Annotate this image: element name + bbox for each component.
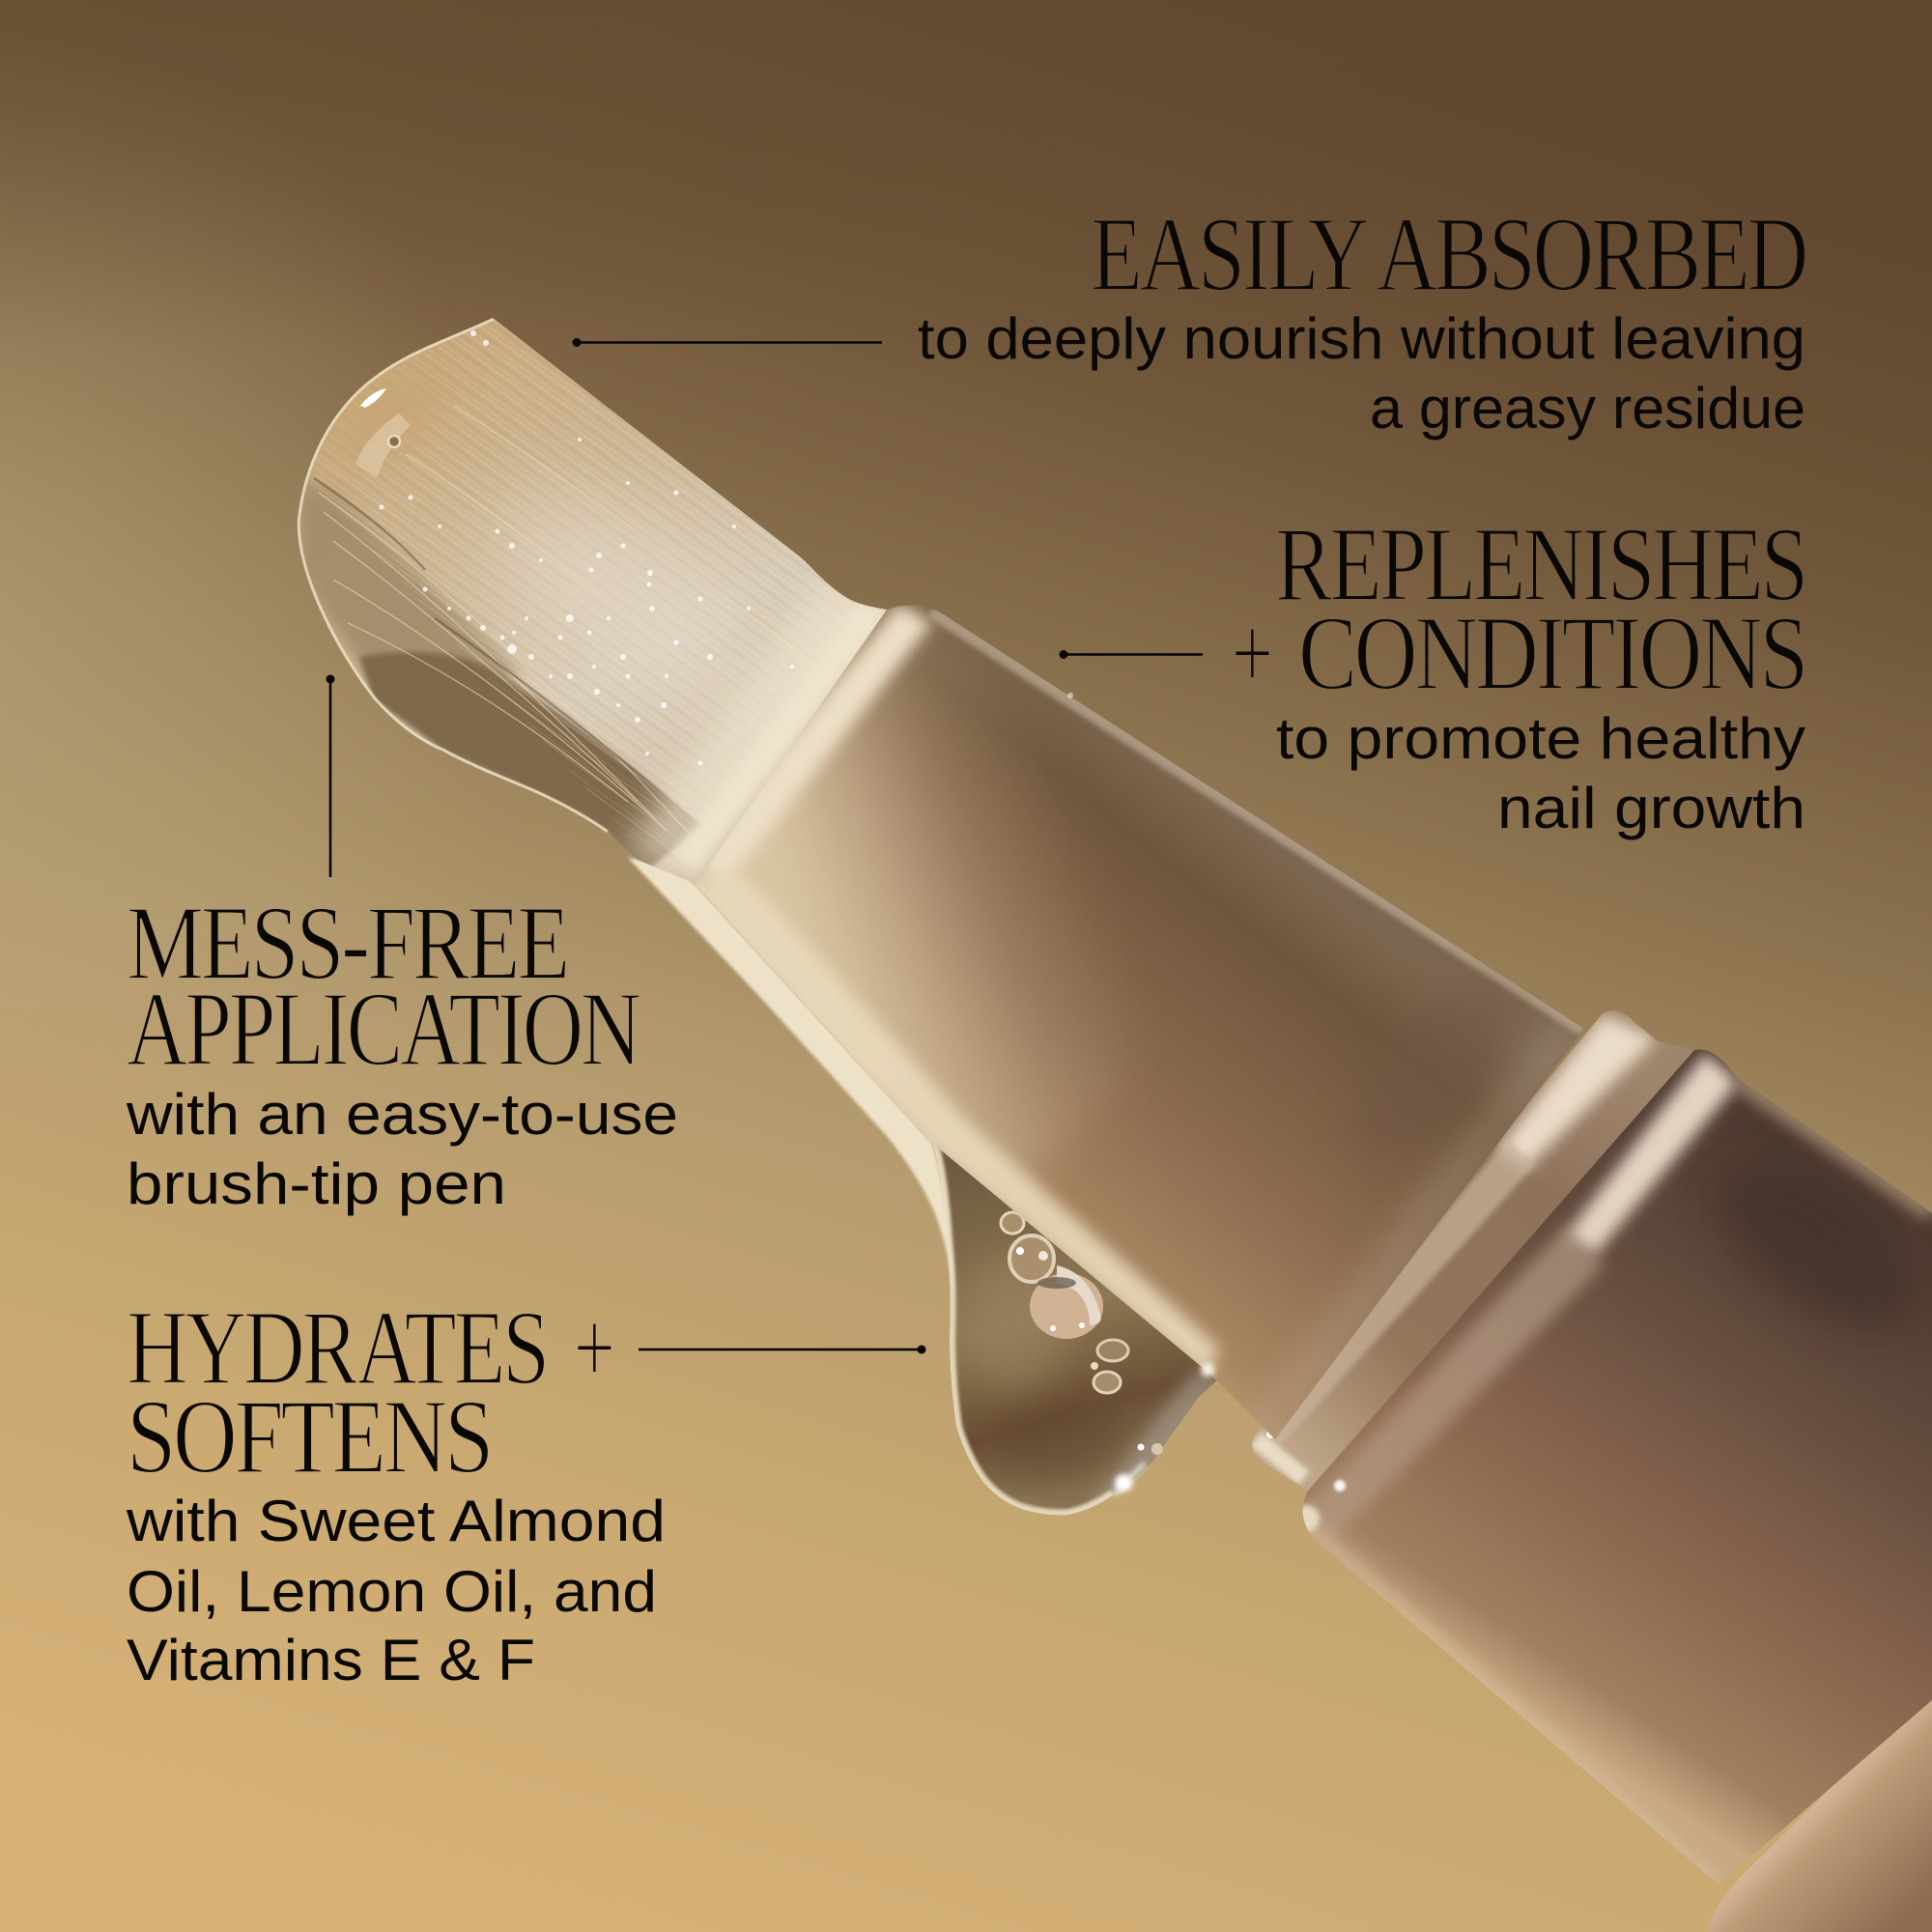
heading: mess-free application (127, 884, 639, 1088)
heading: hydrates + softens: SOFTENS (127, 1378, 491, 1495)
heading: replenishes + conditions: + (1232, 594, 1270, 712)
pen ring one (1252, 1010, 1694, 1491)
body text: easily absorbed: to deeply nourish without leaving (918, 306, 1805, 371)
outline glint (298, 318, 607, 833)
heading: replenishes + conditions: CONDITIONS (1298, 594, 1805, 712)
body text: mess-free: brush-tip pen (127, 1151, 506, 1216)
body text: replenishes: nail growth (1497, 776, 1805, 840)
pen main body (696, 605, 1584, 1439)
body text: mess-free (126, 1082, 678, 1216)
leader line: replenishes (1059, 650, 1203, 659)
heading: hydrates + softens: HYDRATES (127, 1289, 547, 1406)
pen cap at bottom right (1707, 1688, 1932, 1932)
body text: easily absorbed (918, 306, 1805, 440)
callout: replenishes and conditions (1059, 505, 1805, 840)
upper left oil and streaks (295, 478, 522, 705)
body text: replenishes (1276, 706, 1805, 840)
callout: hydrates and softens (126, 1289, 925, 1692)
bristle texture (315, 319, 831, 852)
body text: hydrates: with Sweet Almond (126, 1489, 666, 1553)
ferrule glow (628, 570, 874, 874)
heading: hydrates + softens: + (574, 1289, 612, 1406)
cream oil band along lower edge (628, 858, 954, 1306)
oil drop (932, 1143, 1232, 1517)
leader line: easily absorbed (572, 338, 882, 347)
pen ring two (1293, 1049, 1932, 1889)
heading: replenishes + conditions (1232, 505, 1805, 712)
brush tip (295, 318, 894, 884)
body text: hydrates: Oil, Lemon Oil, and (127, 1559, 657, 1624)
pen illustration (295, 318, 1932, 1932)
leader line: hydrates (639, 1345, 925, 1354)
heading: hydrates + softens (127, 1289, 612, 1495)
oil crescent under bristles (359, 652, 701, 874)
highlights (355, 330, 794, 765)
heading: mess-free application: APPLICATION (127, 970, 639, 1088)
body text: hydrates (126, 1489, 666, 1692)
body text: mess-free: with an easy-to-use (126, 1082, 678, 1147)
body text: hydrates: Vitamins E & F (127, 1628, 535, 1692)
heading: replenishes + conditions: REPLENISHES (1275, 505, 1805, 623)
body text: easily absorbed: a greasy residue (1370, 376, 1805, 440)
leader line: mess-free (327, 674, 334, 877)
callout: mess-free application (126, 674, 678, 1216)
bubbles (1001, 1212, 1163, 1455)
callout: easily absorbed (572, 195, 1805, 440)
stray fibers (319, 406, 777, 835)
shading (696, 605, 1107, 1177)
body text: replenishes: to promote healthy (1276, 706, 1805, 771)
heading: mess-free application: MESS-FREE (127, 884, 567, 1002)
